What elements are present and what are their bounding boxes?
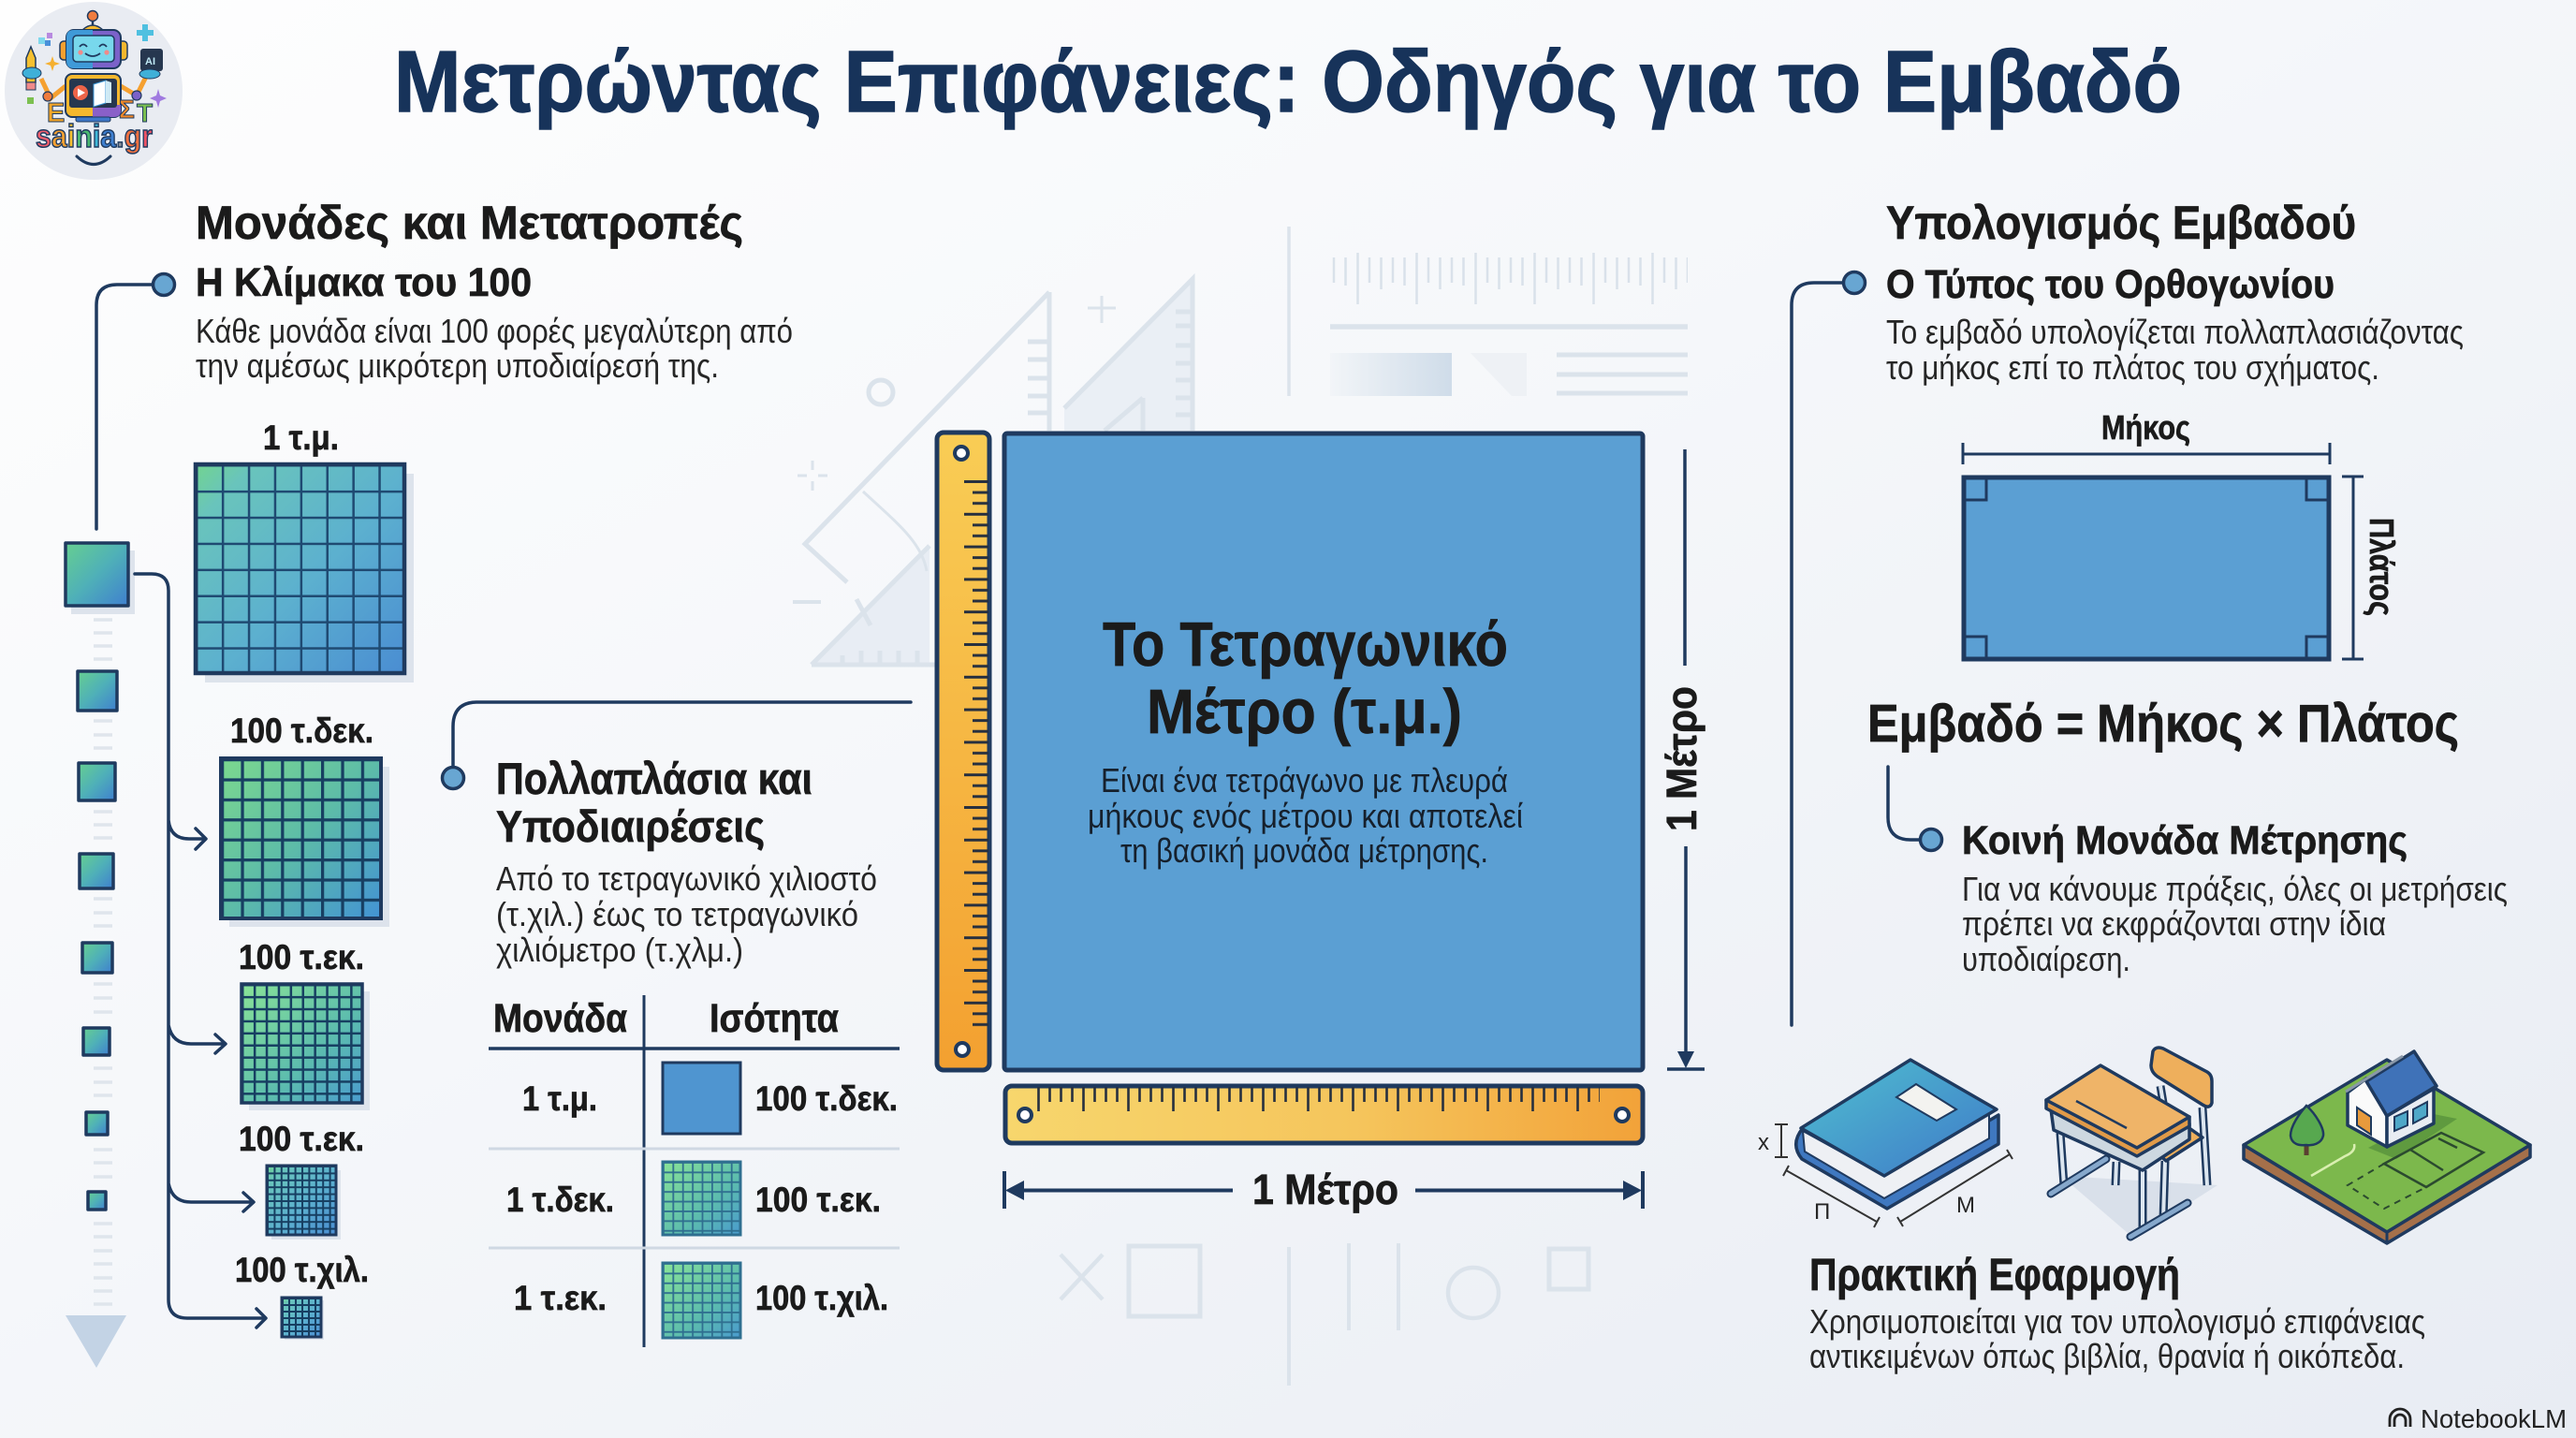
table: unit equalities: [489, 995, 900, 1347]
square heading: Το Τετραγωνικό: [1103, 609, 1508, 680]
subheading: rectangle formula: Ο Τύπος του Ορθογωνίου: [1886, 262, 2334, 307]
square description: μήκους ενός μέτρου και αποτελεί: [1088, 797, 1523, 835]
text: formula description: το μήκος επί το πλάτος του σχήματος.: [1886, 348, 2379, 387]
table: unit equalities: 1 τ.μ.: [522, 1079, 597, 1118]
text: practical application: αντικειμένων όπως βιβλία, θρανία ή οικόπεδα.: [1809, 1337, 2405, 1375]
text: scale of 100 description: Κάθε μονάδα είναι 100 φορές μεγαλύτερη από: [196, 312, 793, 350]
text: formula description: [1886, 313, 2464, 387]
vertical dimension: 1 metre: 1 Μέτρο: [1658, 686, 1705, 831]
grid: 100 sq cm small: 100 τ.εκ.: [239, 1120, 364, 1158]
logo: sainia.gr robot badge: Σ: [119, 95, 135, 124]
square description: Είναι ένα τετράγωνο με πλευρά: [1101, 761, 1508, 800]
icon: book: Π: [1814, 1199, 1830, 1225]
blue square: [1004, 433, 1643, 1070]
logo: sainia.gr robot badge: [5, 2, 183, 180]
square heading: [1103, 609, 1508, 747]
grid: 100 sq mm: 100 τ.χιλ.: [235, 1251, 369, 1289]
text: common unit description: υποδιαίρεση.: [1962, 940, 2130, 978]
vertical ruler: [937, 433, 989, 1070]
table: unit equalities: 100 τ.δεκ.: [755, 1079, 898, 1118]
text: multiples description: χιλιόμετρο (τ.χλμ.): [496, 931, 743, 969]
text: common unit description: πρέπει να εκφράζονται στην ίδια: [1962, 904, 2386, 943]
logo: sainia.gr robot badge: AI: [145, 56, 155, 67]
table: unit equalities: 100 τ.εκ.: [755, 1181, 881, 1219]
branch connector with arrows: [135, 574, 266, 1328]
heading: area calculation: Υπολογισμός Εμβαδού: [1886, 197, 2356, 249]
text: scale of 100 description: [196, 312, 793, 385]
panel: units and conversions: [66, 197, 793, 1368]
icon: book: [1758, 1060, 2012, 1227]
square description: τη βασική μονάδα μέτρησης.: [1120, 831, 1488, 870]
text: common unit description: [1962, 870, 2508, 978]
text: common unit description: Για να κάνουμε πράξεις, όλες οι μετρήσεις: [1962, 870, 2508, 908]
dot marker: [442, 768, 464, 788]
dot marker: [1844, 271, 1865, 294]
dot marker: [154, 273, 174, 296]
logo: sainia.gr robot badge: Τ: [137, 98, 153, 127]
heading: multiples and subdivisions: [496, 754, 812, 851]
heading: multiples and subdivisions: Υποδιαιρέσεις: [496, 801, 765, 851]
subheading: common unit: Κοινή Μονάδα Μέτρησης: [1962, 818, 2408, 863]
table: unit equalities: Μονάδα: [493, 996, 627, 1041]
heading: units and conversions: Μονάδες και Μετατροπές: [196, 197, 743, 249]
icon: school desk: [2046, 1048, 2217, 1239]
logo: sainia.gr robot badge: sainia.gr: [36, 119, 153, 154]
horizontal dimension: 1 metre: 1 Μέτρο: [1252, 1166, 1398, 1213]
grid: 100 sq dm: 100 τ.δεκ.: [230, 712, 373, 750]
square heading: Μέτρο (τ.μ.): [1147, 677, 1462, 747]
icon: book: x: [1758, 1130, 1769, 1155]
logo: sainia.gr robot badge: Ε: [47, 98, 65, 128]
text: multiples description: Από το τετραγωνικό χιλιοστό: [496, 859, 877, 898]
grid: 100 sq dm: [221, 712, 389, 927]
text: formula description: Το εμβαδό υπολογίζεται πολλαπλασιάζοντας: [1886, 313, 2464, 351]
grid: 1 sq m: 1 τ.μ.: [263, 418, 339, 457]
diagram: rectangle with length and width: [1963, 408, 2401, 659]
table: unit equalities: 1 τ.εκ.: [514, 1279, 607, 1317]
grid: 100 sq mm: [235, 1251, 369, 1340]
connector: common unit: [1888, 767, 1920, 840]
panel: area calculation: [1792, 197, 2508, 1025]
text: practical application: [1809, 1251, 2425, 1375]
horizontal dimension: 1 metre: [1004, 1166, 1643, 1213]
diagram: rectangle with length and width: Μήκος: [2101, 408, 2190, 447]
icon: book: Μ: [1956, 1193, 1975, 1218]
dot marker: [1921, 829, 1941, 850]
panel: multiples and subdivisions: [442, 702, 911, 1347]
decorative: faint set squares and drafting shapes: [793, 227, 1688, 1386]
table: unit equalities: Ισότητα: [710, 996, 839, 1041]
table: unit equalities: 1 τ.δεκ.: [506, 1181, 614, 1219]
text: multiples description: (τ.χιλ.) έως το τετραγωνικό: [496, 895, 858, 933]
connector: rectangle formula: [1792, 283, 1843, 1025]
connector: scale of 100: [96, 285, 153, 529]
text: scale of 100 description: την αμέσως μικρότερη υποδιαίρεσή της.: [196, 346, 719, 385]
heading: multiples and subdivisions: Πολλαπλάσια και: [496, 754, 812, 803]
diagram: rectangle with length and width: Πλάτος: [2363, 518, 2401, 616]
grid: 100 sq cm: 100 τ.εκ.: [239, 938, 364, 976]
vertical dimension: 1 metre: [1658, 449, 1705, 1069]
text: multiples description: [496, 859, 877, 969]
icon: land plot with house: [2244, 1051, 2530, 1243]
formula: Εμβαδό = Μήκος × Πλάτος: [1867, 694, 2459, 754]
title: Μετρώντας Επιφάνειες: Οδηγός για το Εμβαδό: [394, 33, 2182, 130]
scale ladder: [66, 543, 135, 1368]
grid: 1 sq m: [196, 418, 414, 682]
square description: [1088, 761, 1523, 870]
grid: 100 sq cm small: [239, 1120, 364, 1240]
text: practical application: Πρακτική Εφαρμογή: [1809, 1251, 2180, 1300]
subheading: scale of 100: Η Κλίμακα του 100: [196, 260, 532, 305]
table: unit equalities: 100 τ.χιλ.: [755, 1279, 888, 1317]
text: practical application: Χρησιμοποιείται για τον υπολογισμό επιφάνειας: [1809, 1302, 2425, 1341]
panel: centre square metre: [937, 433, 1705, 1213]
connector: from centre square: [453, 702, 911, 767]
horizontal ruler: [1005, 1086, 1643, 1143]
NotebookLM badge: NotebookLM: [2421, 1404, 2567, 1433]
grid: 100 sq cm: [239, 938, 370, 1110]
